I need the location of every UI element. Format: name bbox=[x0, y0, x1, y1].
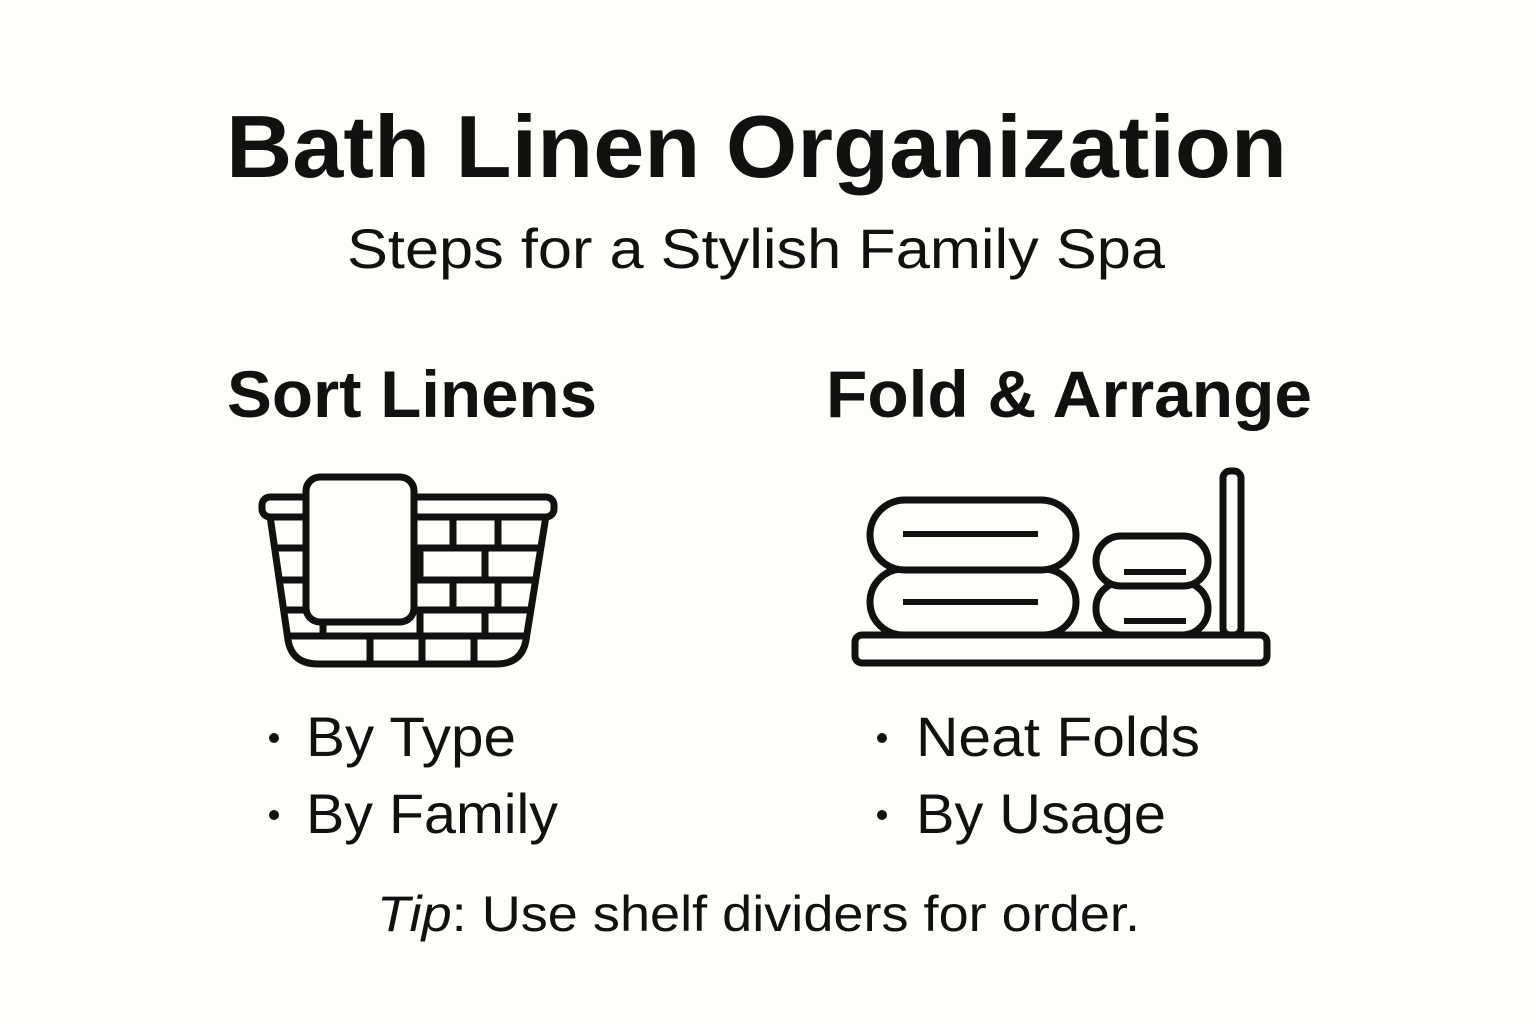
bullets: sort linens bbox=[269, 705, 558, 845]
bullets: fold & arrange bbox=[877, 705, 1200, 845]
bullets: fold & arrange: By Usage bbox=[916, 782, 1166, 845]
title: Bath Linen Organization bbox=[226, 97, 1287, 196]
heading: sort linens: Sort Linens bbox=[227, 357, 597, 431]
icon: folded towels on shelf bbox=[855, 471, 1267, 663]
subtitle: Steps for a Stylish Family Spa bbox=[347, 217, 1166, 280]
bullets: fold & arrange: Neat Folds bbox=[916, 705, 1200, 768]
heading: fold & arrange: Fold & Arrange bbox=[826, 357, 1312, 431]
bullets: sort linens: By Family bbox=[306, 782, 558, 845]
tip: Tip: Use shelf dividers for order. bbox=[377, 886, 1140, 942]
icon: laundry basket bbox=[262, 477, 554, 664]
bullets: sort linens: By Type bbox=[306, 705, 516, 768]
